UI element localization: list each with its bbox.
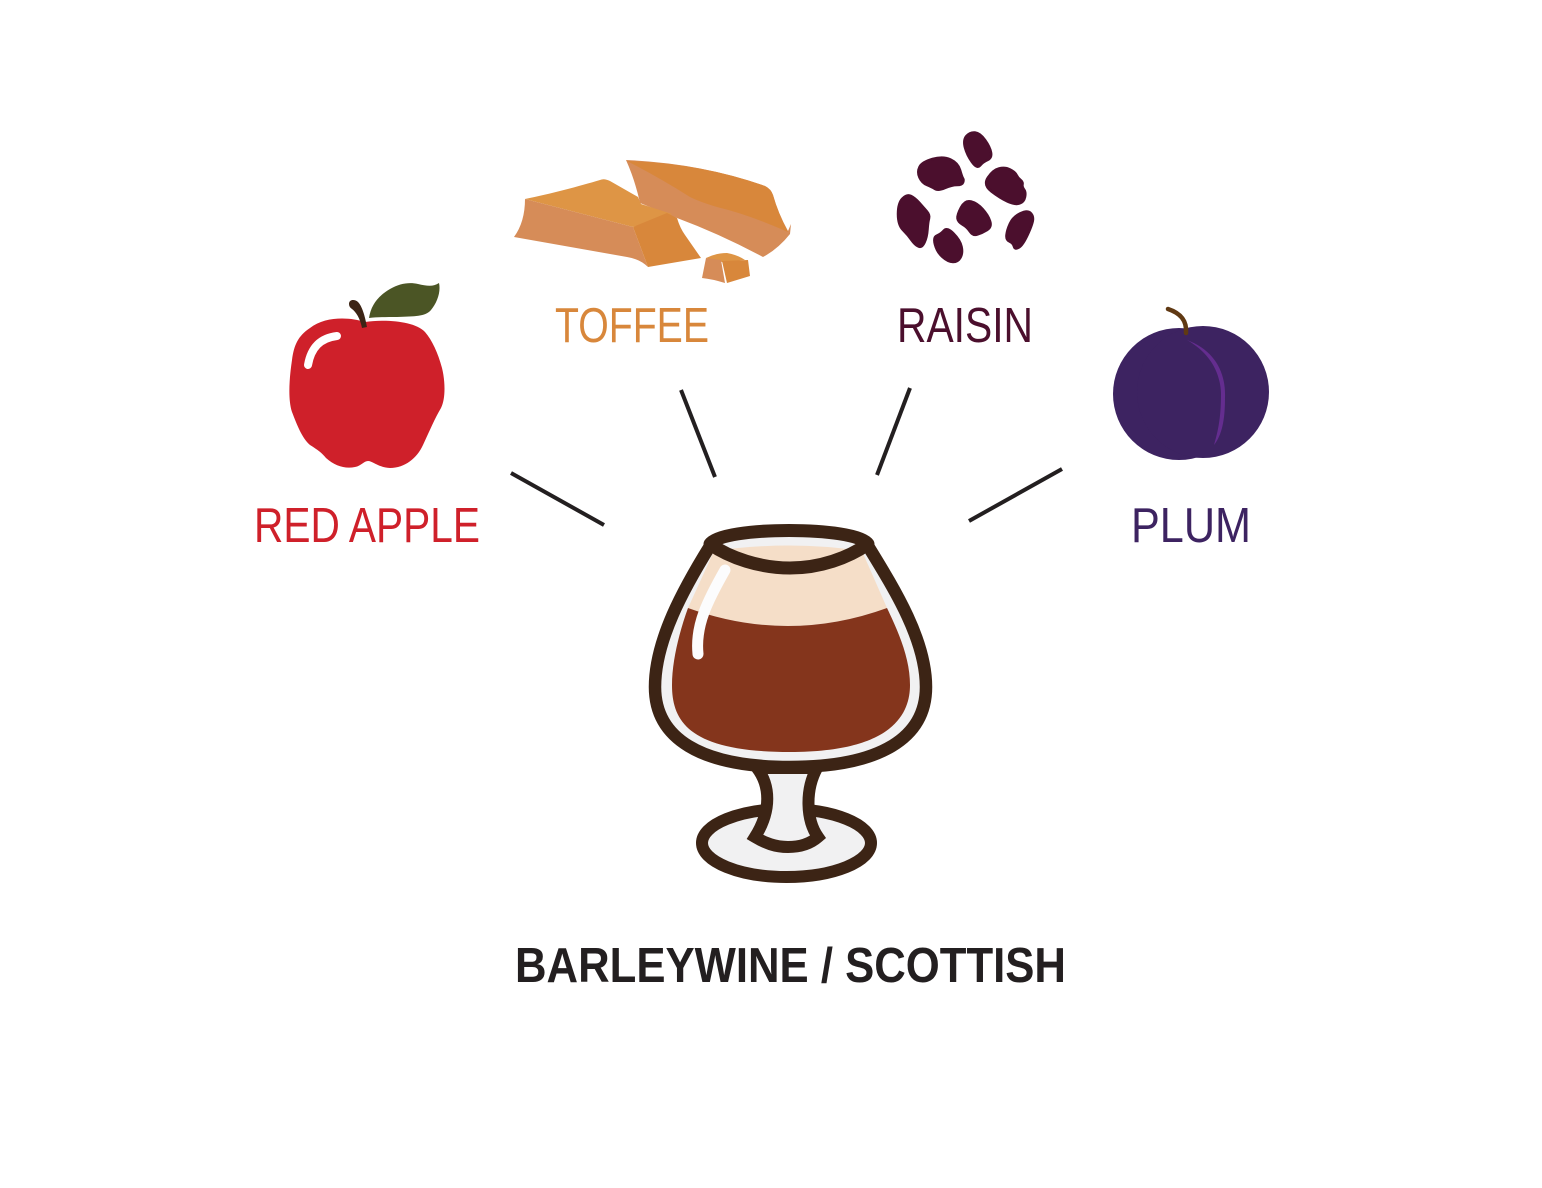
left toffee block [514, 179, 701, 267]
icon: plum [1113, 309, 1269, 460]
plum body [1113, 326, 1269, 460]
connector: toffee to glass [681, 390, 715, 477]
icon: barleywine snifter glass [655, 530, 926, 877]
label: raisin: RAISIN [897, 299, 1033, 353]
icon: toffee [514, 160, 791, 283]
icon: raisins [898, 132, 1033, 262]
label: toffee: TOFFEE [555, 299, 709, 353]
right toffee block [626, 160, 791, 257]
connector: raisin to glass [877, 388, 910, 475]
plum stem [1168, 309, 1186, 333]
glass stem [755, 768, 818, 847]
title: BARLEYWINE / SCOTTISH [515, 939, 1066, 993]
icon: red apple [289, 283, 444, 468]
plum crease [1187, 340, 1225, 445]
bowl outline [655, 546, 926, 767]
connector: red apple to glass [511, 473, 604, 525]
glass rim [710, 530, 868, 568]
label: plum: PLUM [1131, 499, 1251, 553]
foam [688, 546, 887, 626]
apple stem [349, 300, 367, 328]
connector: plum to glass [969, 469, 1062, 521]
label: red apple: RED APPLE [254, 499, 480, 553]
glass highlight [698, 570, 725, 654]
apple body [289, 318, 444, 468]
glass bowl [655, 531, 926, 767]
small toffee piece [702, 253, 750, 283]
apple leaf [369, 283, 440, 318]
apple highlight [308, 336, 337, 365]
beer [672, 608, 910, 752]
glass foot [702, 809, 871, 877]
